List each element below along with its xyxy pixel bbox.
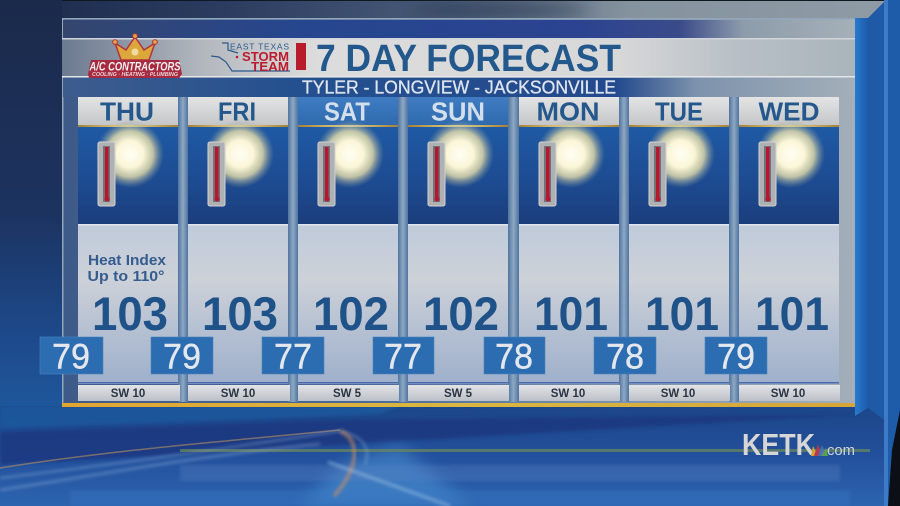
panel: Saturday bbox=[298, 96, 398, 384]
sponsor name: A/C CONTRACTORS bbox=[89, 62, 181, 74]
header bar bbox=[62, 38, 855, 78]
wind row: SW 5 bbox=[333, 388, 362, 400]
day label: SAT bbox=[324, 96, 370, 126]
column separators bbox=[178, 97, 739, 402]
low temperature boxes: 78 bbox=[495, 338, 533, 376]
top band bbox=[63, 20, 854, 39]
sponsor logo: A/C Contractors bbox=[88, 34, 182, 78]
low temperature boxes bbox=[40, 337, 767, 376]
sub band bbox=[63, 78, 854, 97]
wind row: SW 10 bbox=[771, 388, 805, 400]
wind row: SW 10 bbox=[221, 388, 255, 400]
station logo bbox=[742, 427, 855, 462]
high: 102 bbox=[313, 287, 389, 340]
high: 102 bbox=[423, 287, 499, 340]
wind row: SW 10 bbox=[551, 388, 585, 400]
panel: Thursday: Up to 110° bbox=[88, 268, 164, 285]
day label: TUE bbox=[655, 96, 703, 126]
day label: MON bbox=[536, 96, 600, 126]
wind row: SW 10 bbox=[661, 388, 695, 400]
gold baseline bbox=[62, 403, 855, 407]
storm team logo bbox=[211, 42, 290, 74]
bottom floor with reflected light streaks bbox=[0, 406, 900, 506]
low temperature boxes: 77 bbox=[384, 338, 422, 376]
panel: Thursday bbox=[78, 96, 178, 384]
low temperature boxes: 79 bbox=[52, 338, 90, 376]
low temperature boxes: 79 bbox=[717, 338, 755, 376]
KETK wordmark: KETK bbox=[742, 427, 816, 462]
icon: crown bbox=[113, 34, 157, 60]
icon: Texas outline bbox=[211, 43, 290, 71]
right blue pillars bbox=[855, 0, 900, 506]
wind row: SW 10 bbox=[111, 388, 145, 400]
day label: THU bbox=[100, 96, 154, 126]
high: 103 bbox=[92, 287, 168, 340]
high: 101 bbox=[534, 287, 608, 340]
day label: FRI bbox=[218, 96, 256, 126]
wind row bbox=[78, 385, 840, 401]
panel: Sunday bbox=[408, 96, 508, 384]
day label: WED bbox=[758, 96, 820, 126]
low temperature boxes: 78 bbox=[606, 338, 644, 376]
frame panel bbox=[62, 18, 855, 404]
logo line 2: STORM bbox=[242, 49, 289, 64]
day label: SUN bbox=[431, 96, 485, 126]
high: 101 bbox=[755, 287, 829, 340]
logo line 1: EAST TEXAS bbox=[230, 42, 289, 52]
panel: Wednesday bbox=[739, 96, 839, 384]
panel: Friday bbox=[188, 96, 288, 384]
dot com: com bbox=[827, 442, 855, 459]
wind row: SW 5 bbox=[444, 388, 473, 400]
logo line 3: TEAM bbox=[251, 59, 289, 74]
title: 7 DAY FORECAST bbox=[316, 38, 621, 80]
sponsor plate bbox=[88, 60, 182, 78]
panel: Monday bbox=[519, 96, 619, 384]
low temperature boxes: 77 bbox=[274, 338, 312, 376]
high: 103 bbox=[202, 287, 278, 340]
heat index note: Heat Index bbox=[88, 252, 167, 269]
subtitle: TYLER - LONGVIEW - JACKSONVILLE bbox=[302, 78, 616, 98]
sponsor services: COOLING · HEATING · PLUMBING bbox=[92, 72, 178, 78]
icon: peacock bbox=[811, 444, 828, 456]
red accent block bbox=[296, 43, 306, 70]
panel: Tuesday bbox=[629, 96, 729, 384]
low temperature boxes: 79 bbox=[163, 338, 201, 376]
high: 101 bbox=[645, 287, 719, 340]
